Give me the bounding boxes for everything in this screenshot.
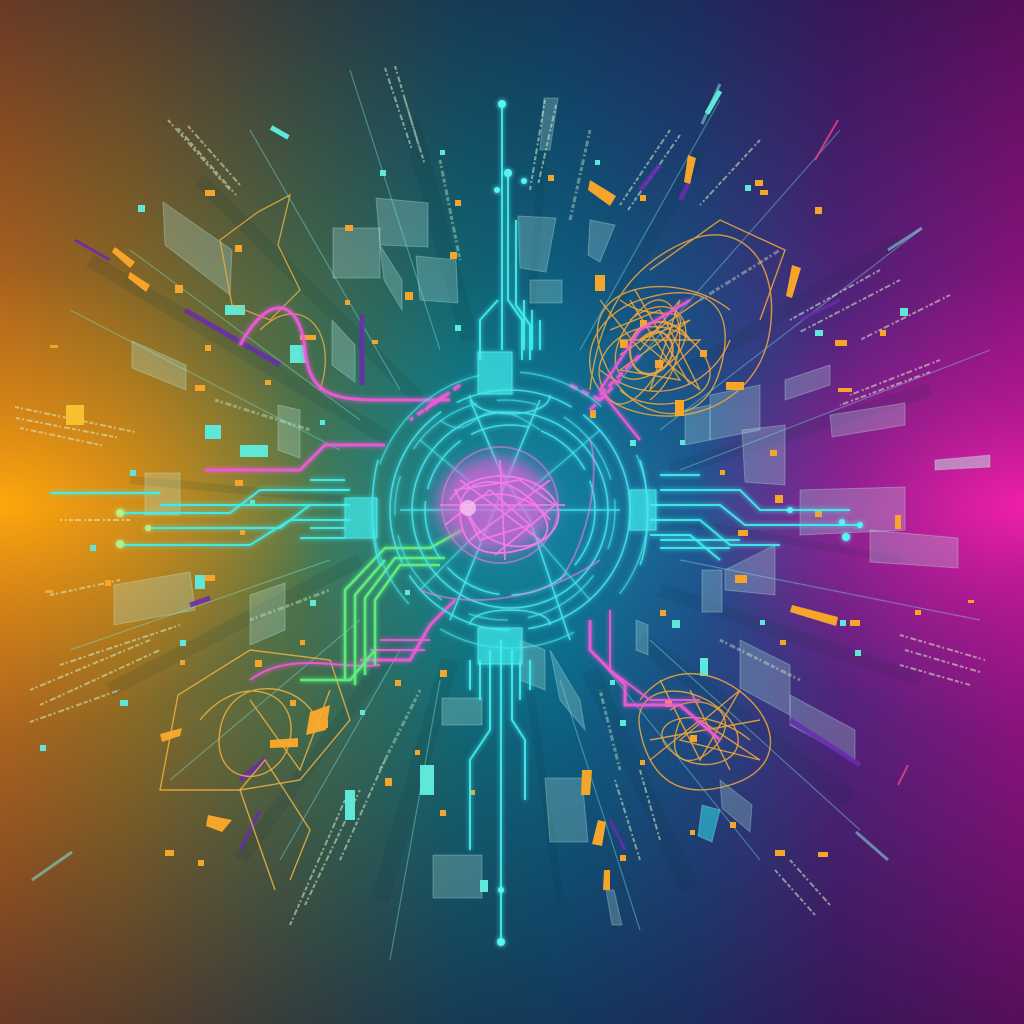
orange confetti: [45, 155, 974, 890]
orange wire tangle upper left: [220, 195, 325, 390]
data text streaks: [15, 66, 985, 925]
translucent data panels: [114, 98, 990, 925]
dark radial bands: [90, 120, 930, 900]
orange wire tangle lower right: [639, 674, 770, 790]
orange wire tangle lower left: [160, 650, 350, 890]
cyan circuit lines: [50, 104, 860, 942]
green circuit traces: [300, 530, 462, 685]
magenta core tangle: [420, 440, 600, 600]
orange wire tangle upper right: [590, 220, 785, 416]
core side connectors: [345, 352, 656, 664]
teal confetti: [40, 90, 908, 892]
purple accent bars: [75, 120, 908, 850]
magenta circuit traces: [205, 300, 720, 740]
magenta core glow: [437, 457, 553, 553]
central ring machine: [372, 372, 648, 648]
circuit node dots: [116, 100, 863, 946]
